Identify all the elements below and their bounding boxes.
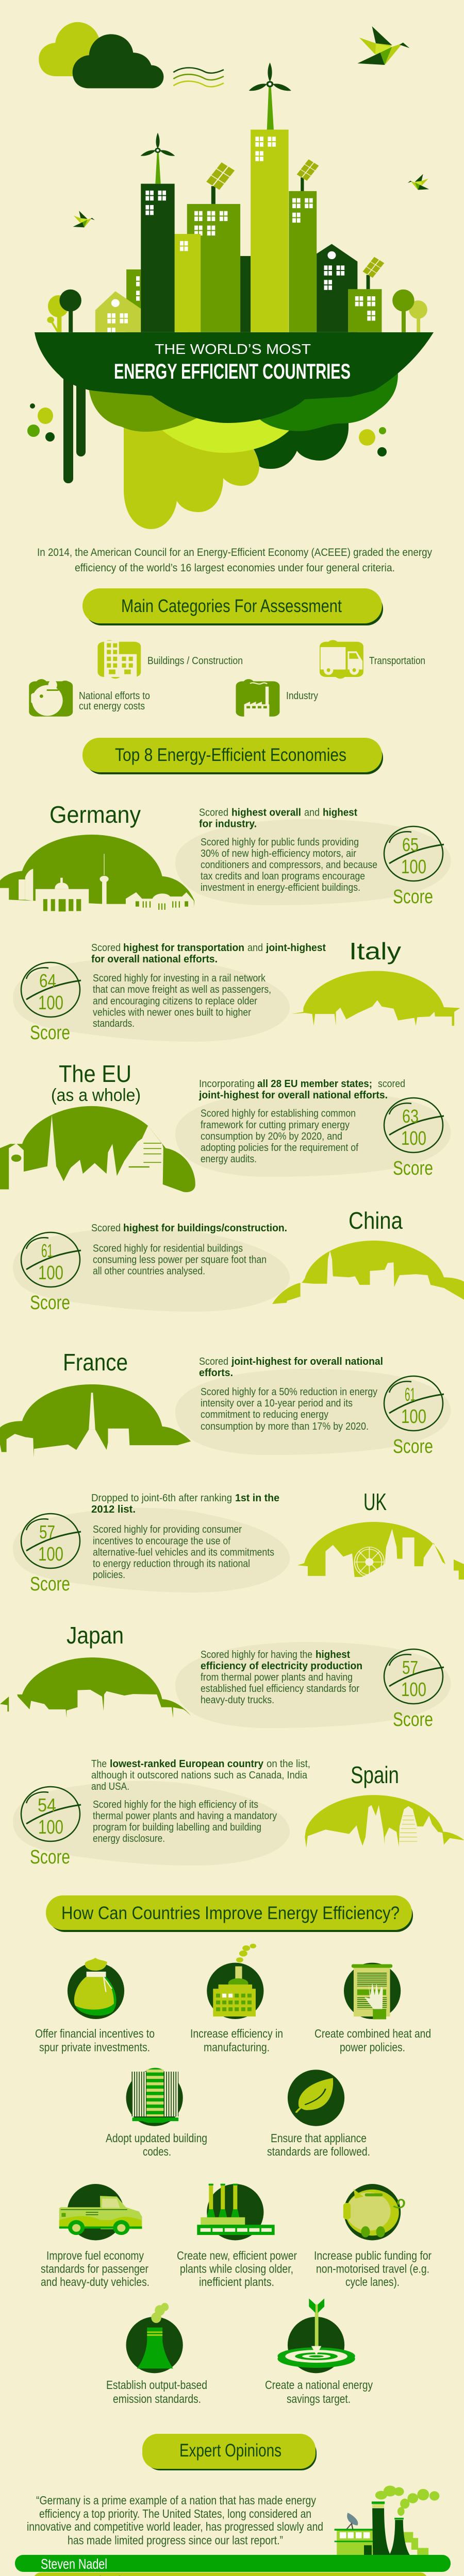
summary: joint-highest for overall national efforts. [198, 1089, 388, 1101]
score 54/100: Score [30, 1846, 70, 1868]
title [114, 341, 351, 383]
skyline: Paris [0, 1384, 191, 1458]
poles under island [63, 371, 86, 483]
label: savings target. [287, 2392, 351, 2405]
icon: skyscraper [126, 2068, 183, 2126]
score 54/100: 54 [38, 1794, 56, 1816]
label: Adopt updated building [106, 2131, 207, 2145]
panel: Spain [13, 1758, 464, 1868]
icon: wind lines [173, 67, 224, 87]
summary: scored [378, 1078, 405, 1090]
description: Scored highly for a 50% reduction in energy [201, 1386, 378, 1398]
summary: Incorporating [199, 1078, 255, 1090]
score 65/100 [384, 826, 444, 908]
heading: main categories: Main Categories For Assessment [121, 596, 342, 616]
skyline: Barcelona [305, 1795, 464, 1848]
label: standards for passenger [41, 2262, 148, 2275]
icon: factory [236, 679, 279, 718]
description: Scored highly for investing in a rail network [93, 972, 266, 984]
panel: Japan [0, 1622, 451, 1731]
description: heavy-duty trucks. [201, 1694, 274, 1706]
description: Scored highly for having the [201, 1649, 312, 1660]
label: Offer financial incentives to [35, 2027, 155, 2040]
country name: Japan [67, 1622, 124, 1649]
summary: highest for buildings/construction. [123, 1222, 287, 1234]
icon: piggy bank savings [343, 2184, 404, 2240]
score 57/100: Score [393, 1709, 433, 1731]
country name: UK [363, 1488, 387, 1515]
icon: piggy bank [29, 679, 73, 717]
label [190, 2027, 283, 2054]
role bar [34, 2572, 427, 2576]
label: industry: Industry [286, 690, 318, 702]
score 54/100 [21, 1787, 81, 1868]
description: adopting policies for the requirement of [201, 1142, 358, 1154]
summary: for industry. [199, 818, 257, 829]
score 63/100 [384, 1098, 444, 1179]
title: ENERGY EFFICIENT COUNTRIES [114, 359, 351, 383]
icon: money bag [68, 1958, 124, 2019]
summary: although it outscored nations such as Canada, India [91, 1769, 308, 1781]
country name: The EU [59, 1060, 131, 1087]
score 64/100 [21, 962, 81, 1044]
summary: Scored [199, 807, 228, 818]
summary: 1st in the [235, 1492, 279, 1504]
panel background [175, 1091, 451, 1177]
panel: UK [13, 1488, 464, 1595]
country name: China [349, 1207, 403, 1234]
panel: China [13, 1207, 464, 1314]
description [93, 972, 271, 1029]
label: inefficient plants. [199, 2275, 274, 2289]
summary: lowest-ranked European country [110, 1758, 264, 1770]
heading: main categories [82, 588, 383, 625]
label: codes. [143, 2145, 171, 2158]
summary: and USA. [91, 1781, 129, 1792]
decorative dots [27, 403, 387, 456]
description: policies. [93, 1569, 125, 1581]
label: national efforts: cut energy costs [79, 701, 145, 712]
label: non-motorised travel (e.g. [316, 2262, 429, 2275]
description: consuming less power per square foot than [93, 1254, 267, 1265]
summary: highest for transportation [123, 942, 244, 954]
summary: efforts. [199, 1367, 233, 1379]
expert name: Steven Nadel [41, 2556, 107, 2572]
score 61/100: 100 [38, 1262, 63, 1284]
summary: all 28 EU member states; [257, 1078, 372, 1090]
score 65/100: Score [393, 886, 433, 908]
summary: for overall national efforts. [91, 953, 218, 965]
description: established fuel efficiency standards for [201, 1683, 359, 1694]
label: plants while closing older, [180, 2262, 293, 2275]
description: Scored highly for residential buildings [93, 1243, 243, 1254]
panel background [175, 1642, 451, 1728]
label: standards are followed. [267, 2145, 370, 2158]
description: highest [316, 1649, 350, 1660]
heading: how can countries improve [46, 1895, 413, 1932]
description: to energy reduction through its national [93, 1558, 250, 1569]
icon: clouds [39, 22, 163, 88]
panel: Germany [0, 801, 451, 912]
description: investment in energy-efficient buildings. [201, 882, 360, 893]
label: Establish output-based [106, 2378, 207, 2392]
score 65/100: 65 [402, 834, 419, 855]
heading: top 8 economies [82, 738, 383, 774]
skyline: London [297, 1522, 464, 1580]
panel: France [0, 1349, 451, 1458]
description [93, 1523, 274, 1581]
score 61/100 [21, 1232, 81, 1314]
score 57/100: 57 [402, 1657, 418, 1678]
label [106, 2378, 207, 2405]
heading: expert opinions [142, 2434, 317, 2470]
country name: Germany [49, 801, 141, 828]
panel background [175, 819, 451, 905]
label: buildings: Buildings / Construction [147, 655, 243, 667]
name bar [15, 2555, 451, 2572]
score 57/100 [21, 1514, 81, 1595]
label [35, 2027, 155, 2054]
quote text: innovative and competitive world leader, has progressed slowly and [27, 2520, 323, 2533]
score 57/100: Score [30, 1573, 70, 1595]
label: Ensure that appliance [271, 2131, 367, 2145]
description: incentives to encourage the use of [93, 1535, 230, 1547]
description: that can move freight as well as passengers, [93, 984, 271, 995]
summary: highest overall [231, 807, 301, 818]
description: Scored highly for providing consumer [93, 1523, 242, 1535]
description: 30% of new high-efficiency motors, air [201, 848, 356, 859]
score 57/100 [384, 1649, 444, 1731]
panel: The EU [0, 1060, 451, 1192]
description: consumption by 20% by 2020, and [201, 1130, 342, 1142]
summary: joint-highest [266, 942, 326, 954]
description: consumption by more than 17% by 2020. [201, 1420, 369, 1432]
country name: Italy [349, 938, 401, 964]
icon: truck [320, 640, 363, 679]
title: THE WORLD’S MOST [155, 341, 311, 357]
icon: efficient factory [207, 1944, 263, 2019]
panel: assessment categories [29, 640, 425, 718]
summary: 2012 list. [91, 1503, 136, 1515]
description: framework for cutting primary energy [201, 1119, 350, 1131]
description: tax credits and loan programs encourage [201, 870, 365, 882]
quote text [27, 2494, 323, 2547]
icon: pickup truck [59, 2184, 142, 2240]
city buildings, turbines, solar panels and trees [47, 62, 427, 332]
description: conditioners and compressors, and because [201, 859, 377, 871]
summary: joint-highest for overall national [231, 1355, 383, 1367]
label: and heavy-duty vehicles. [41, 2275, 150, 2289]
description [201, 836, 377, 893]
description: vehicles with newer ones built to higher [93, 1007, 251, 1018]
quote text: “Germany is a prime example of a nation that has made energy [36, 2494, 316, 2507]
description: from thermal power plants and having [201, 1671, 353, 1683]
label [265, 2378, 373, 2405]
score 64/100: 100 [38, 992, 63, 1014]
label: national efforts: National efforts to [79, 690, 150, 702]
score 57/100: 57 [39, 1521, 55, 1543]
country name: France [63, 1349, 128, 1376]
panel background [175, 1369, 451, 1455]
score 64/100: Score [30, 1022, 70, 1044]
label: Create new, efficient power [177, 2249, 297, 2262]
country name [51, 1060, 141, 1105]
label: manufacturing. [204, 2040, 270, 2054]
score 61/100 [384, 1376, 444, 1458]
description: thermal power plants and having a mandatory [93, 1810, 277, 1822]
description: program for building labelling and building [93, 1821, 261, 1833]
intro text: efficiency of the world’s 16 largest economies under four general criteria. [75, 562, 395, 574]
skyline: Rome [291, 971, 460, 1026]
label [177, 2249, 297, 2289]
skyline: Shanghai [272, 1241, 464, 1308]
description: Scored highly for the high efficiency of its [93, 1799, 258, 1810]
score 57/100: 100 [401, 1679, 426, 1701]
icon: target and arrow [277, 2298, 355, 2373]
panel: improvement actions [35, 1944, 432, 2405]
description [93, 1243, 267, 1277]
label [314, 2249, 432, 2289]
summary: Scored [199, 1355, 228, 1367]
icon: policy document [344, 1963, 401, 2019]
score 61/100: Score [393, 1436, 433, 1458]
heading: top 8 economies: Top 8 Energy-Efficient Economies [115, 745, 346, 765]
summary: and [304, 807, 320, 818]
score 57/100: 100 [38, 1544, 63, 1565]
label: Increase efficiency in [190, 2027, 283, 2040]
label: transportation: Transportation [369, 655, 425, 667]
description: energy disclosure. [93, 1833, 165, 1844]
score 61/100: Score [30, 1292, 70, 1314]
panel: Italy [13, 938, 460, 1044]
label: Improve fuel economy [46, 2249, 144, 2262]
panel background [13, 1508, 290, 1592]
summary: on the list, [267, 1758, 310, 1770]
summary: The [91, 1758, 107, 1770]
score 65/100: 100 [401, 856, 426, 878]
label [314, 2027, 431, 2054]
icon: buildings [97, 640, 141, 679]
description: efficiency of electricity production [201, 1660, 362, 1672]
intro text [37, 547, 432, 574]
description [93, 1799, 277, 1844]
label: spur private investments. [39, 2040, 150, 2054]
summary: Scored [91, 1222, 121, 1234]
summary: Dropped to joint-6th after ranking [91, 1492, 232, 1504]
score 61/100: 61 [405, 1384, 416, 1405]
score 61/100: 61 [41, 1240, 53, 1261]
label [41, 2249, 150, 2289]
quote text: efficiency a top priority. The United States, long considered an [39, 2507, 311, 2520]
skyline: Europe [0, 1106, 195, 1192]
score 63/100: 100 [401, 1128, 426, 1149]
score 54/100: 100 [38, 1817, 63, 1838]
country name: Spain [351, 1761, 399, 1788]
summary: Scored [91, 942, 121, 954]
country name: (as a whole) [51, 1086, 141, 1105]
summary: highest [323, 807, 357, 818]
description: energy audits. [201, 1153, 257, 1165]
heading: expert opinions: Expert Opinions [179, 2441, 281, 2461]
score 64/100: 64 [39, 970, 56, 991]
label: Increase public funding for [314, 2249, 432, 2262]
label: cycle lanes). [345, 2275, 400, 2289]
description: intensity over a 10-year period and its [201, 1397, 353, 1409]
icon: factory with smoke [335, 2486, 439, 2555]
icon: power plant [197, 2184, 275, 2240]
description [201, 1108, 358, 1165]
quote text: has made limited progress since our last report.” [68, 2534, 283, 2547]
island drips [35, 332, 434, 529]
score 63/100: Score [393, 1158, 433, 1179]
label: Create a national energy [265, 2378, 373, 2392]
description: alternative-fuel vehicles and its commitments [93, 1547, 274, 1558]
label: Create combined heat and [314, 2027, 431, 2040]
hero illustration: green city on floating island [27, 22, 434, 529]
icon: cooling tower [126, 2303, 183, 2373]
label [267, 2131, 370, 2158]
score 61/100: 100 [401, 1406, 426, 1428]
description: standards. [93, 1018, 135, 1029]
heading: how can countries improve: How Can Countries Improve Energy Efficiency? [61, 1903, 400, 1923]
icon: origami birds [73, 26, 429, 227]
description: commitment to reducing energy [201, 1409, 329, 1420]
panel background [13, 957, 290, 1042]
description: and encouraging citizens to replace older [93, 995, 257, 1007]
skyline: Berlin [0, 835, 194, 912]
description [201, 1386, 378, 1432]
label: power policies. [340, 2040, 405, 2054]
description: Scored highly for establishing common [201, 1108, 356, 1119]
description: all other countries analysed. [93, 1265, 205, 1277]
icon: leaf [288, 2070, 344, 2126]
label [106, 2131, 207, 2158]
description: Scored highly for public funds providing [201, 836, 359, 848]
label: national efforts [79, 690, 150, 712]
panel background [13, 1227, 290, 1312]
label: emission standards. [113, 2392, 201, 2405]
panel background [13, 1781, 290, 1866]
skyline: Tokyo [0, 1657, 191, 1718]
panel: expert quote 1 [15, 2486, 451, 2576]
score 63/100: 63 [402, 1106, 419, 1127]
summary: and [247, 942, 263, 954]
